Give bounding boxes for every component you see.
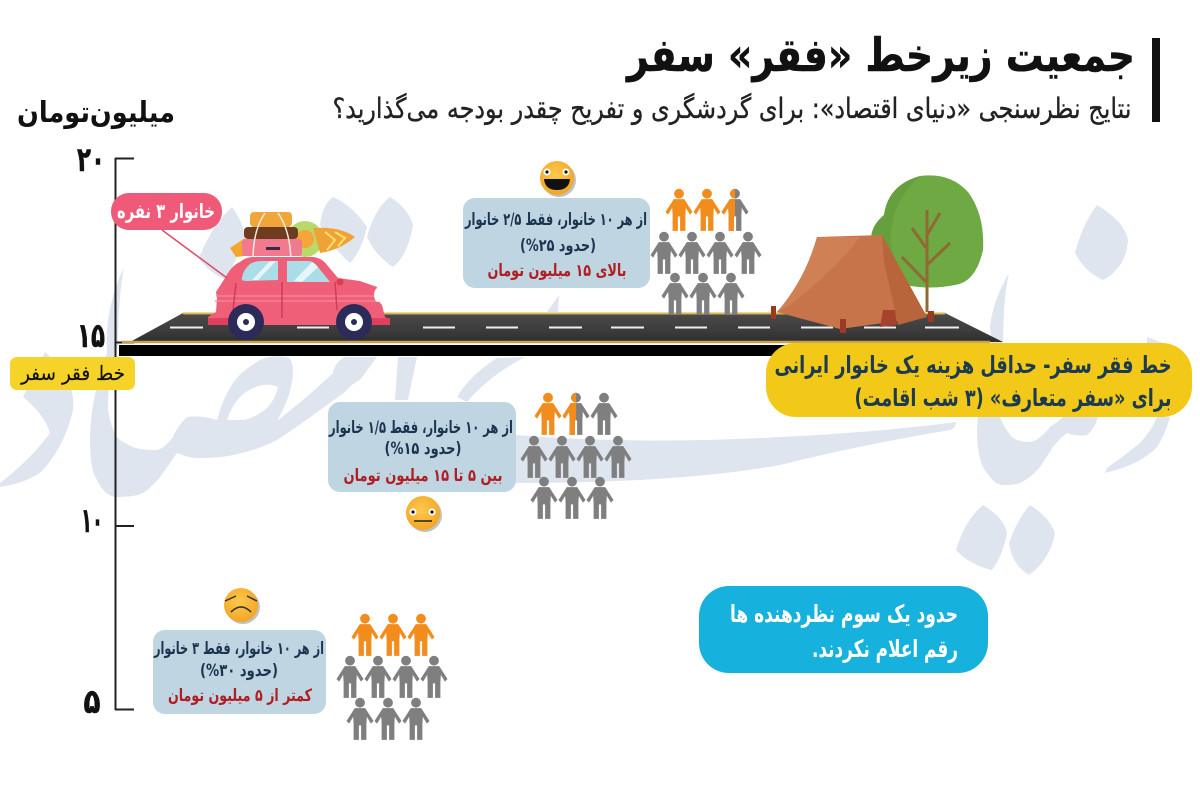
luggage [230, 212, 355, 260]
car windows [242, 261, 278, 281]
icon: tree [871, 175, 983, 312]
people group: 3 of 10 [337, 614, 447, 740]
icon: neutral face [406, 496, 442, 532]
panel: below 5 million: از هر ۱۰ خانوار، فقط ۳ خانوار [153, 639, 324, 659]
axis value 15: ۱۵ [77, 316, 105, 356]
callout: family of three: خانوار ۳ نفره [117, 199, 215, 223]
panel: between 5 and 15 million [328, 402, 516, 492]
axis value 20: ۲۰ [77, 140, 105, 180]
callout: family of three [111, 193, 227, 278]
label: travel poverty line [10, 357, 135, 390]
car body [208, 257, 390, 325]
label: travel poverty line: خط فقر سفر [20, 361, 125, 385]
watermark background [0, 197, 1170, 575]
people group: 2.5 of 10 [651, 189, 761, 314]
axis value 5: ۵ [84, 682, 100, 722]
panel: above 15 million [463, 198, 650, 288]
callout: no answer note: رقم اعلام نکردند. [812, 635, 958, 663]
icon: car with luggage [208, 212, 390, 340]
axis value 10: ۱۰ [81, 501, 103, 541]
panel: between 5 and 15 million: (حدود ۱۵%) [384, 439, 462, 459]
icon: happy face [540, 161, 576, 197]
panel: below 5 million [153, 630, 326, 714]
callout: no answer note [699, 586, 988, 673]
callout: no answer note: حدود یک سوم نظردهنده ها [730, 600, 958, 628]
callout: travel poverty line definition [766, 343, 1192, 417]
people group: 1.5 of 10 [521, 393, 631, 518]
car wheels [228, 304, 372, 340]
panel: above 15 million: از هر ۱۰ خانوار، فقط ۲/۵ خانوار [464, 210, 647, 230]
panel: below 5 million: (حدود ۳۰%) [200, 661, 278, 681]
panel: above 15 million: بالای ۱۵ میلیون تومان [488, 261, 626, 281]
panel: between 5 and 15 million: بین ۵ تا ۱۵ میلیون تومان [344, 466, 502, 486]
icon: tent [771, 235, 934, 333]
y axis [77, 140, 134, 722]
road [119, 313, 1003, 356]
title accent bar [1152, 38, 1160, 122]
y axis unit label: میلیون‌تومان [17, 95, 175, 129]
icon: sad face [224, 588, 260, 624]
panel: below 5 million: کمتر از ۵ میلیون تومان [168, 686, 312, 706]
panel: above 15 million: (حدود ۲۵%) [520, 236, 596, 256]
panel: between 5 and 15 million: از هر ۱۰ خانوار، فقط ۱/۵ خانوار [328, 418, 513, 438]
